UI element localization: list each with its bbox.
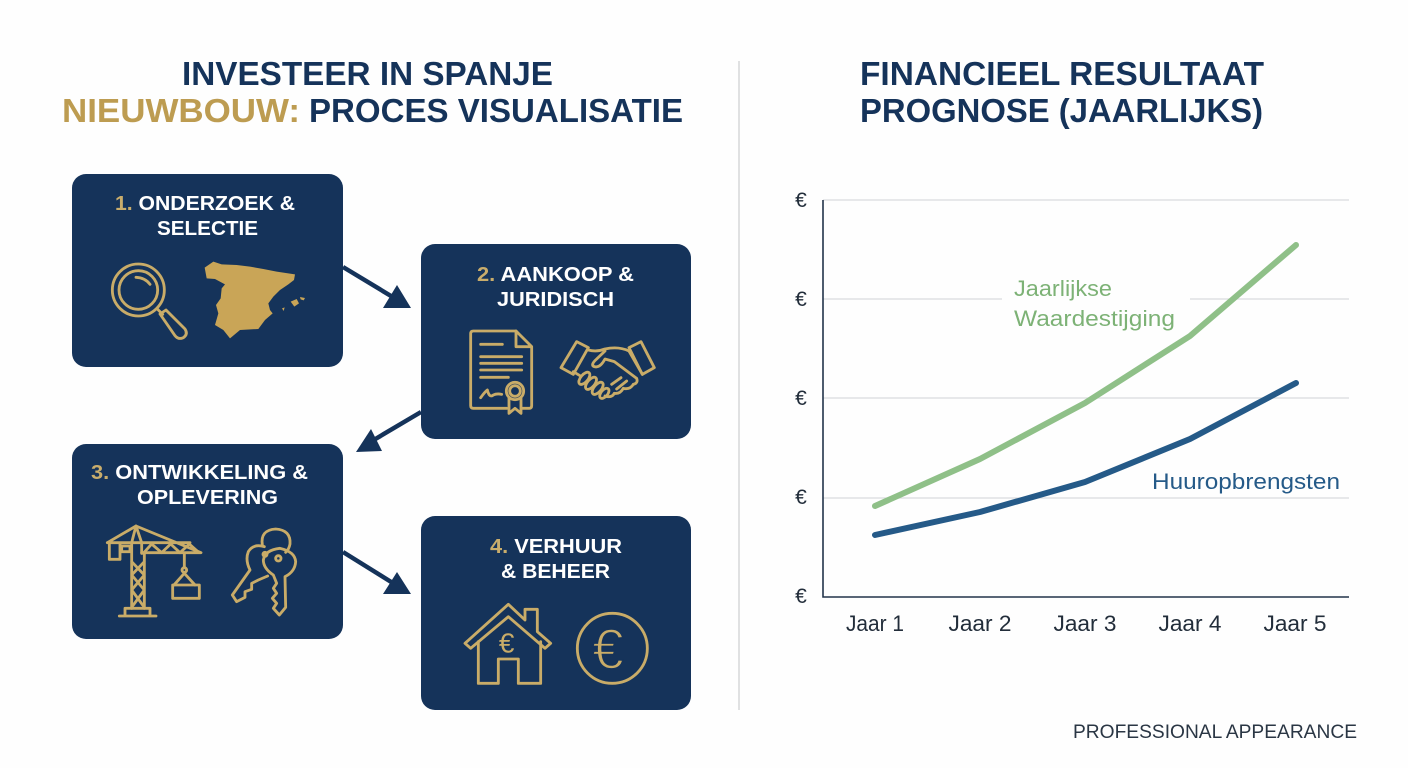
icon: tower crane (107, 526, 201, 616)
series: annual value increase (875, 245, 1296, 506)
arrow: step 2 to 3 (356, 412, 421, 452)
series: rental income (875, 383, 1296, 535)
icon: handshake (561, 342, 654, 400)
icon: contract document (471, 331, 532, 413)
step 2 heading: JURIDISCH (497, 289, 614, 311)
label: annual value increase (1014, 276, 1175, 331)
step 2 heading (477, 264, 634, 311)
title: process visualisation: INVESTEER IN SPANJE (182, 55, 553, 92)
y axis euro labels: € (795, 486, 807, 509)
step 4 heading: 4. VERHUUR (490, 536, 623, 558)
icon: house with euro: € (499, 628, 515, 659)
step 4 heading: & BEHEER (501, 561, 611, 583)
x axis year labels: Jaar 3 (1054, 611, 1116, 636)
step 2 heading: 2. AANKOOP & (477, 264, 634, 286)
x axis year labels (846, 611, 1326, 636)
title: financial forecast: FINANCIEEL RESULTAAT (860, 55, 1264, 92)
step 4 heading (490, 536, 623, 583)
panel: step 3 development and delivery (72, 444, 343, 639)
x axis year labels: Jaar 4 (1158, 611, 1222, 636)
label: rental income: Huuropbrengsten (1152, 469, 1340, 494)
step 1 heading (115, 193, 295, 240)
icon: euro coin (577, 613, 647, 683)
step 1 heading: 1. ONDERZOEK & (115, 193, 295, 215)
panel: step 2 purchase and legal (421, 244, 691, 439)
step 3 heading: OPLEVERING (137, 487, 278, 509)
title: process visualisation: PROCES VISUALISATIE (309, 92, 683, 129)
title: process visualisation (62, 55, 683, 129)
y axis euro labels: € (795, 387, 807, 410)
step 1 heading: SELECTIE (157, 218, 258, 240)
icon: map of Spain (205, 262, 305, 338)
y axis euro labels (795, 189, 807, 608)
panel: step 4 rental and management (421, 516, 691, 710)
icon: magnifying glass (112, 264, 186, 338)
x axis year labels: Jaar 2 (948, 611, 1012, 636)
step 3 heading: 3. ONTWIKKELING & (91, 462, 308, 484)
label: annual value increase: Jaarlijkse (1014, 276, 1112, 301)
arrow: step 1 to 2 (343, 267, 411, 308)
x axis year labels: Jaar 5 (1264, 611, 1326, 636)
label: annual value increase: Waardestijging (1014, 306, 1175, 331)
icon: euro coin: € (592, 619, 624, 682)
arrow: step 3 to 4 (343, 552, 411, 594)
y axis euro labels: € (795, 189, 807, 212)
title: financial forecast: PROGNOSE (JAARLIJKS) (860, 92, 1263, 129)
x axis year labels: Jaar 1 (846, 611, 904, 636)
panel: step 1 research and selection (72, 174, 343, 367)
title: financial forecast (860, 55, 1264, 129)
line chart: annual financial forecast (795, 189, 1349, 636)
icon: keys (232, 529, 296, 615)
y axis euro labels: € (795, 288, 807, 311)
footer note: PROFESSIONAL APPEARANCE (1073, 722, 1357, 743)
icon: house with euro (465, 604, 551, 683)
y axis euro labels: € (795, 585, 807, 608)
title: process visualisation: NIEUWBOUW: (62, 92, 300, 129)
step 3 heading (91, 462, 308, 509)
